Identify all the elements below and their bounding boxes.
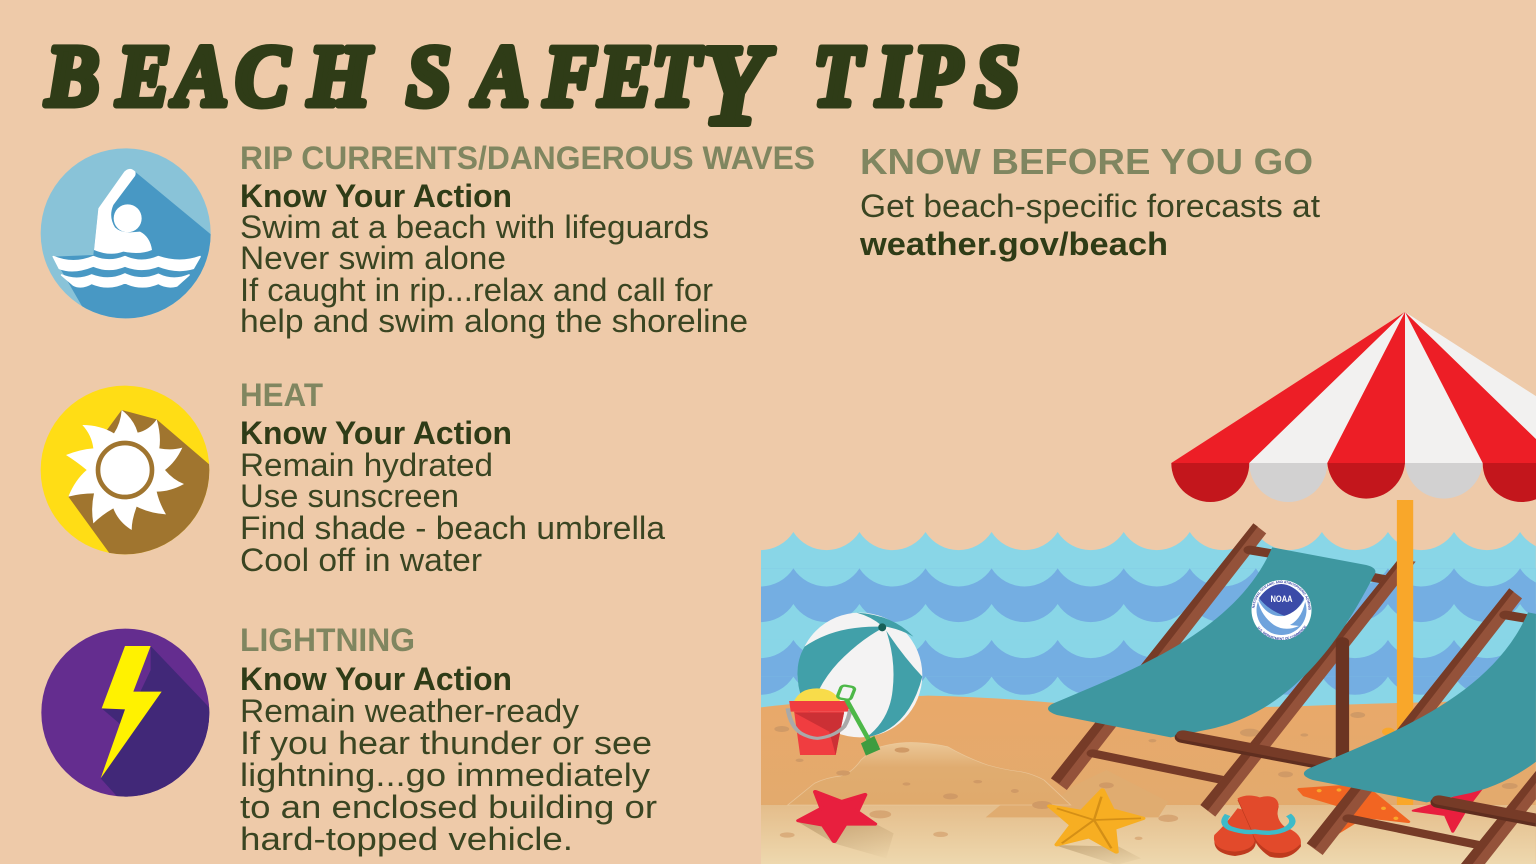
noaa logo: NATIONAL OCEANIC AND ATMOSPHERIC ADMINISTRATION [1252, 580, 1311, 610]
beach ball [797, 613, 922, 737]
shovel [837, 685, 880, 756]
section: heat: HEAT [240, 377, 323, 413]
section: lightning: hard-topped vehicle. [240, 821, 573, 857]
section: rip currents: help and swim along the shoreline [240, 303, 748, 339]
starfish: yellow [1049, 790, 1143, 864]
section: know before you go [859, 141, 1320, 262]
section: lightning: Remain weather-ready [240, 693, 579, 729]
section: heat: Know Your Action [240, 415, 512, 451]
sand bucket [788, 688, 850, 755]
section: rip currents: If caught in rip...relax and call for [240, 272, 713, 308]
section: lightning: LIGHTNING [240, 622, 415, 658]
section: lightning: to an enclosed building or [240, 789, 657, 825]
deck chair: right [1304, 588, 1536, 864]
starfish: orange [1299, 786, 1408, 833]
section: lightning: If you hear thunder or see [240, 725, 652, 761]
title: TIPS [791, 29, 1020, 125]
section: lightning: Know Your Action [240, 661, 512, 697]
icon: lightning [41, 628, 210, 797]
section: know before you go: KNOW BEFORE YOU GO [860, 141, 1313, 182]
starfish: red right [1413, 787, 1483, 832]
section: heat: Cool off in water [240, 542, 482, 578]
section: heat: Find shade - beach umbrella [240, 510, 665, 546]
sand [761, 696, 1536, 864]
starfish: red [798, 792, 894, 858]
title: Y [702, 22, 775, 148]
umbrella canopy [1171, 312, 1536, 502]
section: rip currents: Know Your Action [240, 178, 512, 214]
flip-flops [1214, 796, 1301, 858]
noaa logo [1252, 580, 1312, 640]
icon: swimmer [40, 148, 211, 318]
title: BEACH SAFET [46, 29, 700, 125]
deck chair: left [1048, 523, 1416, 817]
section: lightning: lightning...go immediately [240, 757, 650, 793]
section: lightning [240, 622, 657, 857]
section: heat: Use sunscreen [240, 478, 459, 514]
section: rip currents [240, 140, 815, 339]
beach scene [727, 480, 1536, 864]
section: heat [240, 377, 665, 578]
section: heat: Remain hydrated [240, 447, 493, 483]
section: rip currents: Never swim alone [240, 240, 506, 276]
noaa logo: U.S. DEPARTMENT OF COMMERCE [1258, 625, 1306, 640]
waves [727, 532, 1536, 719]
section: know before you go: weather.gov/beach [859, 226, 1168, 262]
umbrella pole [1382, 480, 1413, 805]
noaa logo: NOAA [1270, 594, 1293, 605]
icon: sun [40, 386, 210, 554]
section: rip currents: RIP CURRENTS/DANGEROUS WAVES [240, 140, 815, 176]
section: know before you go: Get beach-specific forecasts at [860, 188, 1320, 224]
section: rip currents: Swim at a beach with lifeguards [240, 209, 709, 245]
